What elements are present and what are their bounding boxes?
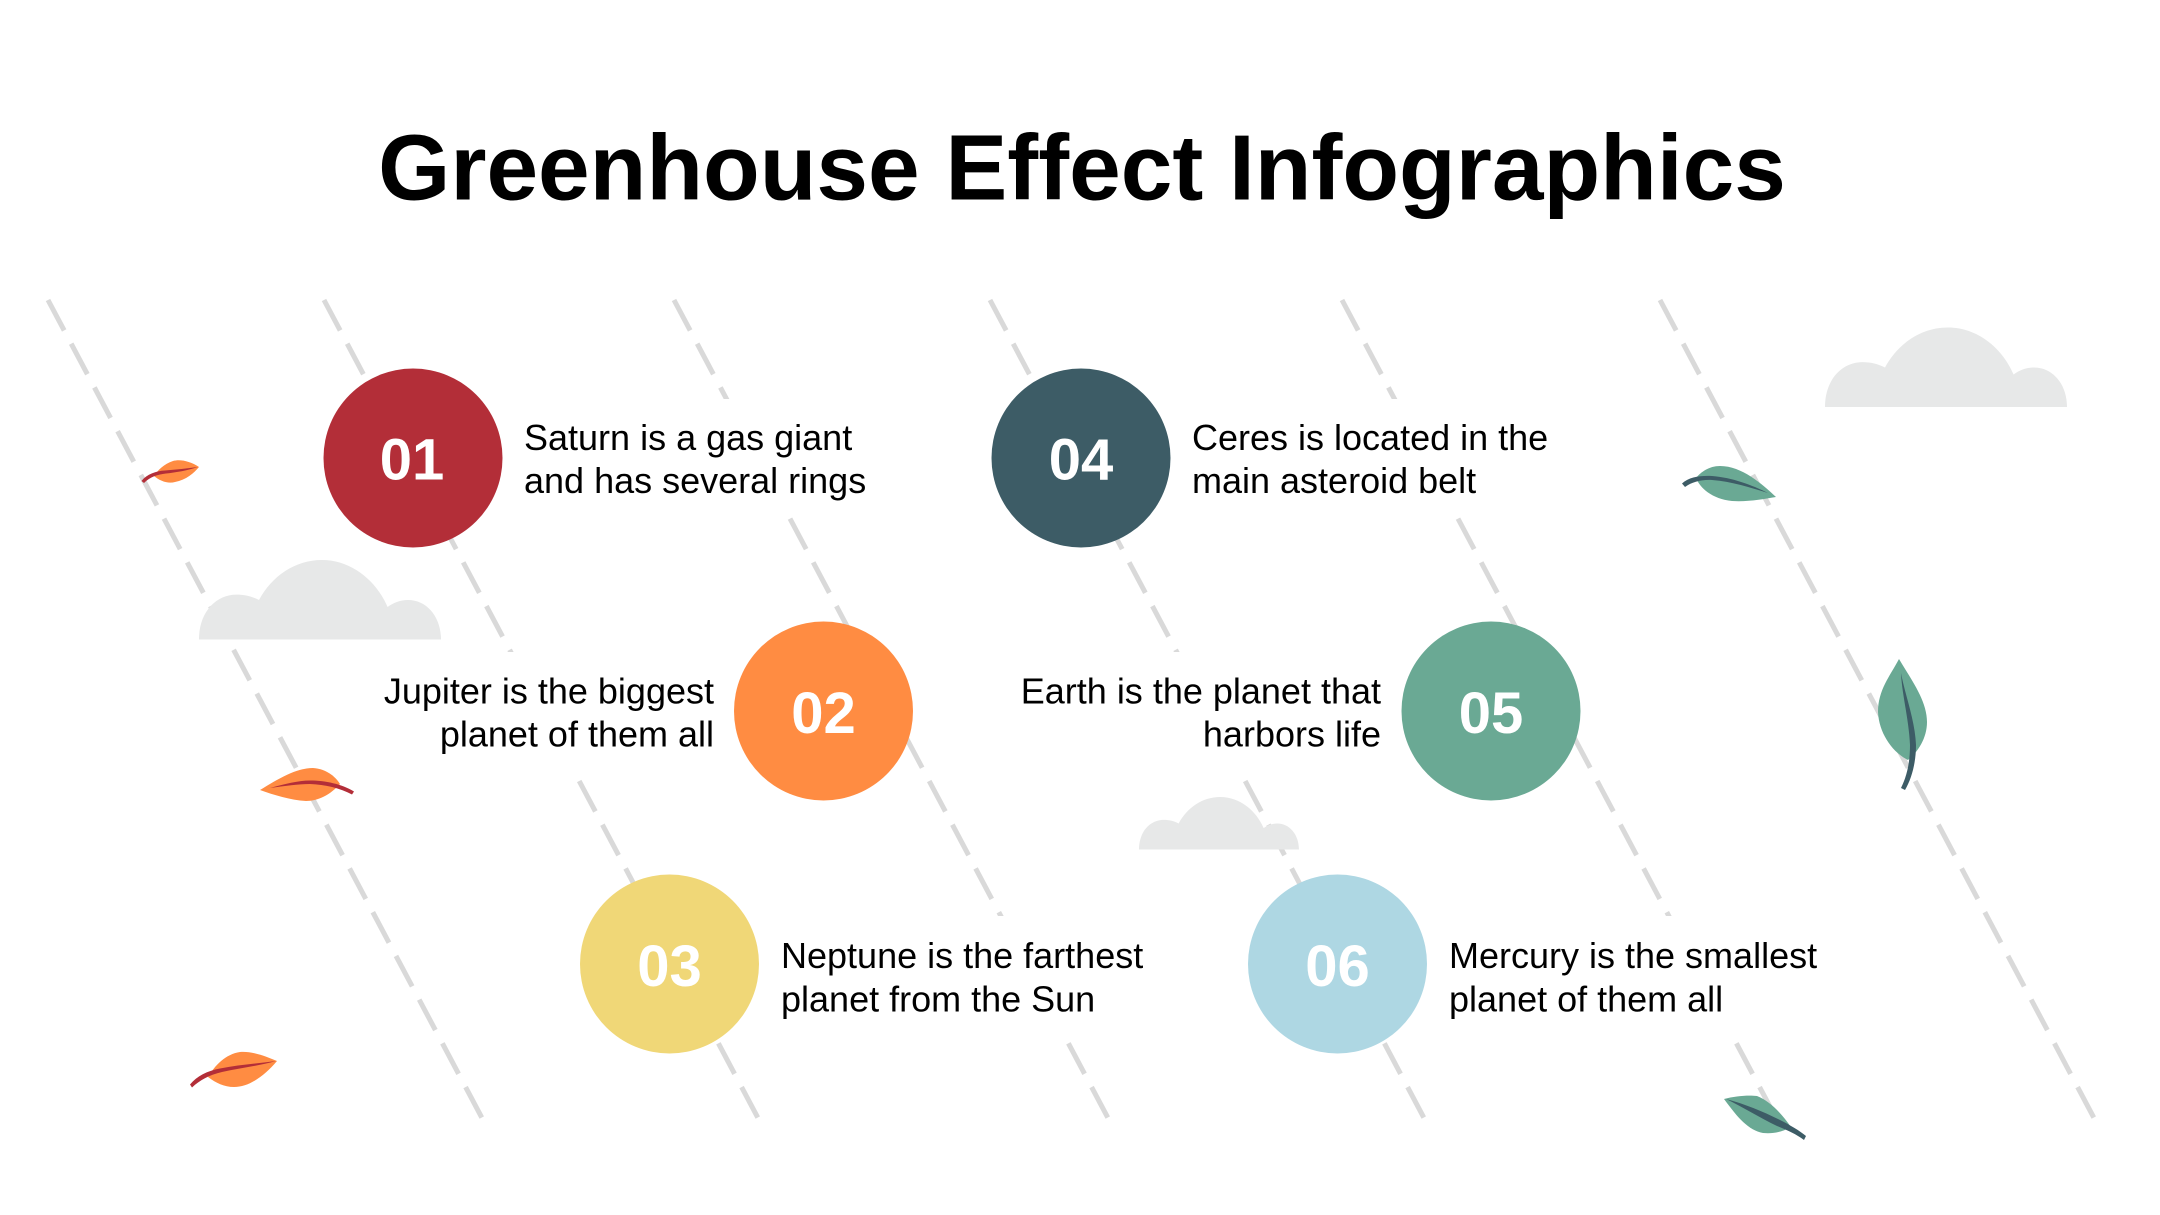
description 05: harbors life (1203, 714, 1381, 754)
number badge 01 (324, 368, 502, 548)
item 04 (992, 368, 1548, 548)
item 02 (384, 622, 913, 800)
icon: top teal leaf (1682, 466, 1776, 501)
description 04: Ceres is located in the (1192, 417, 1548, 458)
icon: middle orange leaf (260, 768, 354, 801)
description 01: and has several rings (524, 460, 866, 501)
number badge 04: 04 (1049, 428, 1113, 492)
cloud: center (1139, 797, 1299, 850)
number badge 01: 01 (380, 428, 444, 492)
icon: bottom teal leaf (1724, 1096, 1806, 1140)
description 06: planet of them all (1449, 978, 1723, 1020)
number badge 03 (580, 874, 759, 1054)
description 03: planet from the Sun (781, 978, 1095, 1020)
number badge 03: 03 (637, 934, 702, 999)
description 05: Earth is the planet that (1021, 670, 1381, 712)
item 06 (1248, 874, 1817, 1054)
number badge 06 (1248, 874, 1427, 1054)
number badge 06: 06 (1305, 934, 1370, 999)
icon: bottom orange leaf (190, 1052, 277, 1088)
dashed diagonal lines (48, 300, 2094, 1118)
description 02: Jupiter is the biggest (384, 670, 714, 712)
number badge 04 (992, 368, 1170, 548)
icon: small orange leaf (142, 460, 199, 483)
item 01 (324, 368, 866, 548)
white text backing boxes (380, 399, 1830, 1036)
item 05 (1021, 622, 1580, 800)
cloud: top right (1825, 328, 2067, 407)
cloud: left (199, 560, 441, 640)
description 02: planet of them all (440, 714, 714, 754)
number badge 02: 02 (791, 681, 856, 746)
title: Greenhouse Effect Infographics (378, 116, 1786, 220)
number badge 05: 05 (1459, 681, 1523, 746)
description 03: Neptune is the farthest (781, 935, 1143, 976)
number badge 05 (1402, 622, 1580, 800)
description 06: Mercury is the smallest (1449, 935, 1817, 976)
description 01: Saturn is a gas giant (524, 417, 852, 458)
number badge 02 (734, 622, 913, 800)
description 04: main asteroid belt (1192, 460, 1476, 501)
item 03 (580, 874, 1143, 1054)
icon: vertical teal leaf (1878, 659, 1927, 790)
